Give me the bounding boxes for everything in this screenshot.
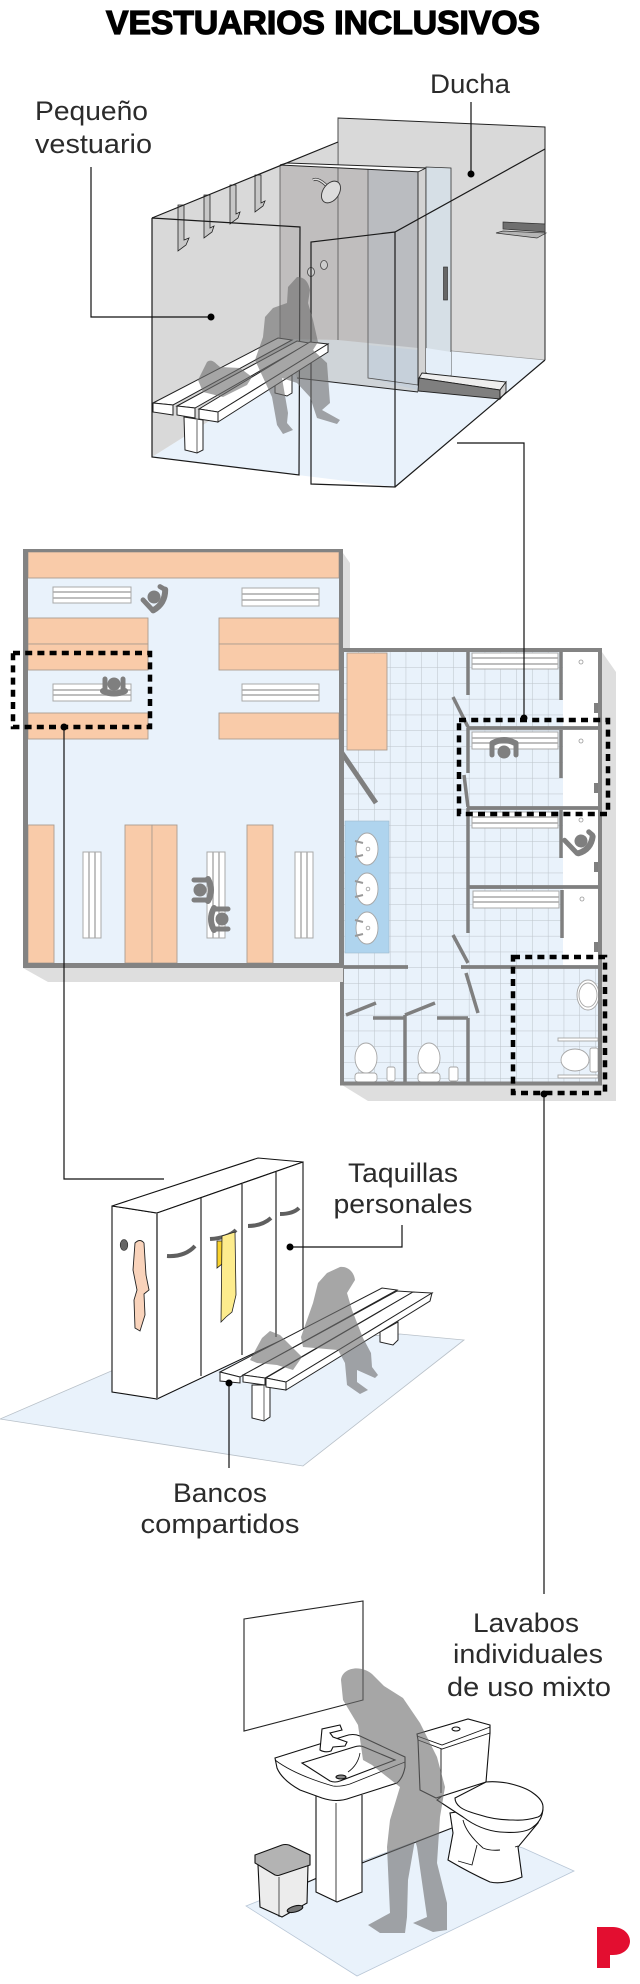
washbasin — [275, 1725, 405, 1800]
toilet rim — [437, 1782, 543, 1832]
tiled floor — [343, 650, 600, 1084]
label: lavabos individuales de uso mixto — [447, 1608, 611, 1702]
white locker column — [563, 652, 598, 965]
illustration: shower and small changing room — [91, 102, 546, 487]
floor — [0, 1334, 464, 1466]
label: pequeño vestuario: vestuario — [35, 129, 152, 159]
lockers — [28, 552, 339, 963]
shower head — [313, 178, 344, 206]
hooks — [178, 175, 265, 251]
label: lavabos individuales de uso mixto: Lavabos — [473, 1608, 579, 1638]
label: bancos compartidos: compartidos — [140, 1509, 300, 1539]
seated person silhouette — [301, 1267, 378, 1394]
dashed highlight: lockers — [13, 653, 150, 727]
person on bench — [211, 908, 228, 930]
leader: pequeño vestuario — [91, 167, 214, 320]
left wall — [152, 142, 338, 457]
shower cubicle — [280, 118, 451, 392]
toilet base — [448, 1810, 538, 1883]
floor plan: left section — [13, 549, 350, 982]
label: bancos compartidos — [140, 1478, 300, 1539]
leader: plan to shower — [457, 443, 528, 722]
sink counter — [345, 821, 389, 953]
label: taquillas personales — [334, 1158, 472, 1219]
orange locker — [347, 653, 387, 750]
label: taquillas personales: Taquillas — [348, 1158, 458, 1188]
shadow — [23, 968, 343, 982]
partition walls — [342, 652, 598, 1085]
outer walls — [342, 650, 600, 1084]
floor — [26, 551, 341, 965]
person top view — [103, 678, 125, 694]
label: ducha: Ducha — [430, 69, 511, 99]
wall hook — [120, 1240, 128, 1250]
leader: ducha — [468, 102, 474, 178]
bag silhouette — [198, 361, 252, 397]
yellow towels — [217, 1232, 236, 1322]
bench — [153, 338, 328, 453]
bin — [255, 1844, 310, 1917]
floor plan: right section — [342, 650, 616, 1101]
bench — [220, 1288, 432, 1421]
dashed highlight: toilet — [513, 957, 605, 1093]
bag silhouette — [250, 1331, 302, 1370]
person on shower bench — [492, 740, 516, 758]
standing person silhouette — [341, 1668, 447, 1933]
shower benches — [472, 653, 559, 908]
leader: plan to lockers — [60, 724, 164, 1179]
outer walls — [23, 549, 343, 968]
label: lavabos individuales de uso mixto: individuales — [453, 1639, 603, 1669]
toilet tank — [417, 1719, 490, 1798]
back wall — [338, 118, 545, 360]
knobs — [308, 260, 328, 276]
leader: plan to toilet — [540, 1090, 548, 1594]
logo — [597, 1927, 630, 1968]
label: pequeño vestuario: Pequeño — [35, 96, 148, 126]
label: pequeño vestuario — [35, 96, 152, 159]
person on bench — [194, 879, 211, 901]
toilet — [417, 1719, 543, 1883]
label: bancos compartidos: Bancos — [173, 1478, 267, 1508]
shadow — [342, 652, 616, 1101]
seated person silhouette — [255, 277, 340, 434]
wall line — [308, 1828, 452, 1882]
benches — [53, 587, 319, 938]
shelf — [496, 222, 546, 238]
toilets — [355, 980, 599, 1082]
leader: bancos — [226, 1380, 232, 1468]
toilet lid — [455, 1782, 543, 1820]
step — [418, 373, 506, 399]
mirror — [244, 1601, 363, 1731]
title: VESTUARIOS INCLUSIVOS — [106, 4, 540, 41]
illustration: lockers and shared bench — [0, 1158, 464, 1468]
illustration: individual mixed-use toilet — [244, 1601, 574, 1976]
peach towel — [133, 1240, 149, 1331]
right wall and door lines — [152, 142, 545, 487]
floor — [246, 1828, 574, 1976]
washbasin pedestal — [316, 1795, 362, 1902]
leader: taquillas — [286, 1225, 402, 1250]
label: lavabos individuales de uso mixto: de uso mixto — [447, 1672, 611, 1702]
locker unit — [112, 1158, 303, 1399]
label: taquillas personales: personales — [334, 1189, 472, 1219]
locker handles — [167, 1208, 299, 1256]
person walking — [141, 583, 168, 612]
person walking in locker — [563, 823, 596, 856]
dashed highlight: shower — [459, 720, 608, 814]
floor — [152, 340, 545, 487]
locker knobs — [579, 660, 584, 901]
